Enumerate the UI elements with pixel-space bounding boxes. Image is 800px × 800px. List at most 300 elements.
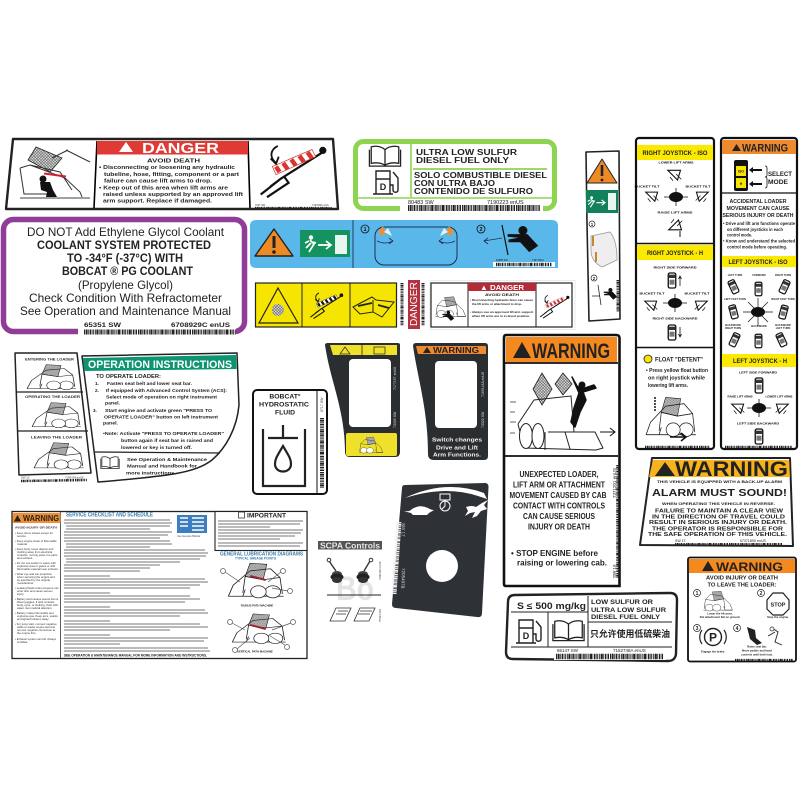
text block: the lift arms or attachment to drop. [472,302,522,306]
text block: steps: If equipped with Advanced Control System (ACS): [106,388,228,393]
icon: joysticks [327,558,373,583]
panel: alarm must sound decal [640,458,793,546]
barcode: 81455 SW [496,259,508,262]
text: switch note: Switch changes [432,438,482,444]
text block: warning message: LIFT ARM OR ATTACHMENT [513,480,605,490]
text: manual note: SEE OPERATION & MAINTENANCE MANUAL FOR MORE INFORMATION AND INSTRUCTIONS. [64,654,207,658]
text: hydrostatic fluid: BOBCAT° [269,392,301,400]
step 2: stop the engine: STOP [771,602,786,608]
section: right joystick iso: LOWER LIFT ARMS [658,160,694,164]
step 4: raise seat bar: controls until both lock. [741,652,773,656]
text block: warning bullets: • Wear eye and ear protection [15,572,52,576]
text block: alarm message: FAILURE TO MAINTAIN A CLEAR VIEW [655,508,783,514]
step 4: raise seat bar [734,624,782,656]
text block: steps: 1. [95,381,99,386]
text block: warning message: • STOP ENGINE before [511,548,598,558]
text block: danger instructions [99,158,243,204]
text: hydrostatic fluid [259,392,309,416]
text block: AVOID DEATH [485,292,519,297]
icon: person under raised lift arms [20,147,90,198]
window opening [349,359,391,427]
text block: warning bullets: material. [17,542,28,546]
chart: radius path machine diagram [220,563,292,608]
section: right joystick h: RIGHT SIDE BACKWARD [652,316,699,320]
text block: alarm message: WHEN OPERATING THIS VEHICLE IN REVERSE. [662,501,775,506]
text block: low sulfur message [591,600,667,621]
text block: warning message: raising or lowering cab. [517,558,607,568]
step 3: engage brake: 3 [696,626,699,632]
text block: warning message: INJURY OR DEATH [528,522,590,532]
text block: when lift arms are in a raised position. [471,314,530,318]
text block: alarm message: RESULT IN SERIOUS INJURY OR DEATH. [649,520,788,526]
section: right joystick h [637,245,713,340]
text block: steps: 2. [95,388,99,393]
text block: warning bullets: ventilate. [17,640,28,644]
text block: warning bullets: • Battery acid causes severe burns. [15,597,59,601]
rotated part numbers [378,561,382,622]
text block: accidental movement warning: • Know and understand the selected [723,238,795,244]
icon: speed arc [405,487,487,499]
chart: vertical path machine diagram [228,614,296,654]
text block: danger instructions: tubeline, hose, fitting, component or a part [104,172,239,178]
heading: lubrication diagrams [220,552,303,560]
text block: danger instructions: raised unless supported by an approved lift [103,192,243,198]
rotated part numbers: 75323 SW [378,609,382,622]
section: right joystick h: BUCKET TILT [684,292,710,296]
barcode [725,446,792,448]
section: left joystick iso: RIGHT TURN [725,326,741,330]
text block: warning bullets: • Battery makes flammable and [15,611,54,615]
step 1: lower lift arms: Put attachment flat on ground. [700,615,740,619]
step 2: stop the engine: Stop the engine. [767,615,789,619]
section: left joystick h: LOWER LIFT ARMS [766,394,792,398]
section: right joystick h: RIGHT JOYSTICK - H [647,251,703,257]
icon: step 1 window latches: 1 [363,227,367,233]
icon: step 1: 1 [591,222,594,227]
text block: steps: Fasten seat belt and lower seat bar. [107,381,192,386]
icon: exit sign [300,230,350,257]
text block: warning bullets: • Do not use loader in space with [15,561,56,565]
icon: fuel pump [373,171,398,194]
section: left joystick iso: LEFT TURN [776,326,790,330]
step 2: stop the engine [758,590,789,619]
barcode: 7190223 enUS [487,200,524,206]
icon: piston and oil drop [263,425,305,486]
step 2: stop the engine: 2 [760,591,763,597]
heading: danger [97,140,248,157]
section: left joystick iso: LEFT JOYSTICK - ISO [728,260,788,266]
text block: steps: TO OPERATE LOADER: [96,374,161,380]
text block: low sulfur message: ULTRA LOW SULFUR [591,608,667,614]
barcode: rotated: SW 19 [612,564,617,578]
panel: lever plate left [325,343,400,457]
section: left joystick h [722,354,796,444]
panel: scpa controls decal [318,541,382,622]
section: left joystick h: LEFT SIDE BACKWARD [737,422,780,426]
section: float detent: • Press yellow float button [646,368,709,374]
rotated part numbers: 73320 SW [481,411,485,428]
text block: warning bullets: • Keep engine clean of flammable [15,539,57,543]
text block: warning bullets: and lighted tobacco away. [17,617,49,621]
heading: warning: WARNING [716,560,783,574]
icon: select mode switch: H [740,182,743,186]
text block: accidental movement warning: control mode before operating. [727,244,787,250]
barcode [78,322,236,335]
text block: warning bullets: • Keep body, loose objects and [15,547,54,551]
heading: warning [722,140,796,154]
icon: select mode switch [734,160,792,191]
watermark: Bo [336,570,374,608]
section: float detent: on right joystick while [648,376,705,382]
heading: operation instructions: OPERATION INSTRUCTIONS [88,359,232,371]
panel: danger avoid death decal [6,139,338,209]
panel: right joystick decal column [634,138,714,449]
step 1: lower lift arms: Lower the lift arms. [707,612,733,616]
text block: steps: Start engine and activate green "PRESS TO [105,408,212,413]
text block: coolant message: BOBCAT ® PG COOLANT [62,264,194,278]
panel: ultra low sulfur fuel decal [356,142,554,212]
panel: yellow pictogram strip [256,283,396,327]
icon: step 2 person pushing [477,225,538,255]
text block: warning bullets: explosive gas. Keep arcs, sparks [17,614,58,618]
text: hydrostatic fluid: FLUID [275,410,295,416]
section: right joystick h: BUCKET TILT [640,292,665,296]
heading: warning [12,513,60,523]
text block: warning bullets: cable to loader engine last and [17,625,56,629]
panel: compact danger decal [402,280,575,330]
text: switch note: Drive and Lift [436,446,478,452]
icon: cylinder [540,295,569,318]
text block: danger instructions: failure can cause lift arms to drop. [104,178,213,184]
icon: select mode switch: ISO [738,170,744,174]
panel: low sulfur diesel decal [506,593,677,661]
icon: warning triangle [259,288,298,323]
text block: fuel message: ULTRA LOW SULFUR [416,148,517,157]
panel: hydrostatic fluid decal [253,390,327,494]
text block: • Disconnecting hydraulic lines can cause [470,298,533,302]
text block: service lines [64,520,210,651]
step 3: engage brake: P [709,630,717,644]
text block: fuel message: CONTENIDO DE SULFURO [414,187,533,196]
text block: warning message: CONTACT WITH CONTROLS [513,502,606,510]
barcode: 7169139 enUS [65,476,84,480]
panel: leave the loader warning decal [688,558,796,662]
text block: warning bullets: • Exhaust system can kill. Always [15,637,57,641]
text block: warning bullets: remove negative connection at [17,628,55,632]
text block: warning message: MOVEMENT CAUSED BY CAB [510,491,607,500]
step 4: raise seat bar: 4 [736,626,739,632]
icon: step 1 [589,221,617,267]
icon: select mode switch: SELECT [768,171,792,178]
barcode: rotated [612,465,618,578]
text block: warning bullets: manufacturer. [17,581,34,585]
barcode: rotated: 7371201 enUS [612,468,617,498]
text block: danger instructions: • Disconnecting or loosening any hydraulic [99,165,235,171]
rotated part numbers [393,366,397,428]
text block: steps: button again if seat bar is raised and [121,438,213,443]
heading: danger: ▲ DANGER [480,283,525,292]
icon: book [369,146,401,166]
text block: steps: lowered or key is turned off. [121,445,192,450]
text block: warning bullets: the engine first. [17,631,36,635]
text block: fuel message: CON ULTRA BAJO [414,179,495,188]
panel: service checklist sheet [12,512,307,658]
section: left joystick h: RAISE LIFT ARMS [728,394,752,398]
panel: throttle plate [392,483,488,617]
text block: fuel message: DIESEL FUEL ONLY [416,156,510,165]
step 3: engage brake: Engage the brake. [701,650,725,654]
panel: operation instructions pictures: ENTERING THE LOADER [25,356,74,362]
text block: alarm message: ALARM MUST SOUND! [652,488,787,499]
text block: accidental movement warning: MOVEMENT CAN CAUSE [726,206,790,212]
icon: parts logo [177,515,207,538]
text block: coolant message [20,225,231,318]
text block: low sulfur message: LOW SULFUR OR [591,600,654,606]
barcode [616,280,620,312]
text: switch note [432,438,482,458]
step 1: lower lift arms: 1 [696,591,699,597]
text block [470,292,533,318]
heading: danger: DANGER [142,140,219,157]
text block: warning bullets: enter skin and cause serious [17,589,53,593]
text block: warning bullets: injury. [17,592,24,596]
heading: warning: WARNING [675,458,788,481]
section: float detent [644,355,709,441]
heading: warning: WARNING [433,346,479,355]
icon: fuel pump [516,620,541,643]
text: sulfur limit: S ≤ 500 mg/kg [517,601,586,611]
window opening [435,361,477,428]
callout: important: IMPORTANT [247,512,286,520]
text block: alarm message: THE OPERATOR IS RESPONSIBLE FOR [652,526,784,532]
section: right joystick iso: BUCKET TILT [634,184,660,188]
chart: vertical path machine diagram: VERTICAL PATH MACHINE [237,650,273,654]
text block: warning bullets: • Keep doors closed except for [15,531,53,535]
icon: warning triangle [587,159,617,183]
barcode: 6737189D enUS [740,539,767,543]
heading: service checklist: SERVICE CHECKLIST AND SCHEDULE [66,512,153,518]
icon: manual with wrench [353,297,394,317]
text block: see manual [126,457,207,476]
section: left joystick iso: RIGHT FAST TURN [771,297,795,301]
text block: coolant message: (Propylene Glycol) [78,278,173,292]
panel: lever plate right with warning [413,343,488,460]
text block: steps: panel. [105,400,120,406]
text block: warning bullets: and exhaust. [17,556,33,560]
barcode: 86147 SW [557,648,579,653]
text block: warning bullets: AVOID INJURY OR DEATH [15,526,57,530]
section: left joystick iso: FORWARD [752,273,766,277]
text block: accidental movement warning: • Drive and lift arm functions operate [723,221,796,226]
rotated part numbers: 73409 SW [393,411,397,428]
section: left joystick iso: LEFT TURN [728,273,742,277]
text block: warning bullets: explosive dust or gases or with [17,564,56,568]
text block: low sulfur message: DIESEL FUEL ONLY [591,615,660,621]
barcode: 7167898 enUS [312,204,329,207]
panel: narrow exit decal [586,151,620,321]
text block: alarm message: IN THE DIRECTION OF TRAVEL COULD [652,514,786,520]
text block: accidental movement warning: on different joysticks in each [727,227,783,232]
heading: pictograms [330,345,397,355]
icon: pedals [330,608,375,621]
icon: striped lift cylinder [261,146,326,197]
icon: step 2 person pushing: 2 [479,227,483,233]
section: left joystick iso: BACKWARD [725,323,741,327]
icon: rabbit [465,500,488,518]
icon: turtle [403,506,434,515]
barcode: 7167780 A [532,259,544,262]
barcode: 80483 SW [408,200,434,206]
panel: blue exit strip decal [250,220,558,268]
text block: warning bullets: as specified by the original [17,578,50,582]
heading: lubrication diagrams: GENERAL LUBRICATION DIAGRAMS [220,552,303,558]
text block: warning bullets: contacts, moving parts, hot parts [17,553,58,557]
heading: scpa controls: SCPA Controls [320,542,381,550]
text block: danger instructions: • Keep out of this area when lift arms are [99,186,228,192]
text: instructions heading [706,576,778,588]
heading: lubrication diagrams: TYPICAL GREASE POINTS [235,556,277,560]
text block: warning message [510,470,607,568]
text block: danger instructions: AVOID DEATH [147,158,200,164]
section: left joystick iso: LEFT FAST TURN [724,297,746,301]
panel: operation instructions pictures: LEAVING THE LOADER [31,434,82,440]
section: left joystick iso [722,256,796,348]
section: left joystick iso: RIGHT TURN [775,273,791,277]
barcode and part numbers [394,522,406,594]
text block: steps: •Note: Activate "PRESS TO OPERATE LOADER" [103,431,224,436]
icon: exit sign [586,190,618,213]
icon: manual book [101,457,119,468]
icon: step 2: 2 [593,276,596,281]
chart: radius path machine diagram: RADIUS PATH MACHINE [241,604,273,608]
icon: orange warning triangle [255,229,293,256]
barcode [645,446,710,448]
barcode: 6708929C enUS [171,322,231,329]
barcode: 65351 SW [84,322,122,329]
text block: warning message: UNEXPECTED LOADER, [520,470,598,479]
icon: step 2 [591,275,617,305]
section: left joystick iso: BACKWARD [751,324,767,328]
text block: steps: Select mode of operation on right instrument [106,394,218,400]
rotated part numbers: 7169114A enUS [481,371,485,397]
barcode [735,659,793,661]
section: right joystick h: RIGHT SIDE FORWARD [654,266,698,270]
text block: see manual: Manual and Handbook for [127,464,197,470]
icon: parts logo: Use Genuine Bobcat [177,535,200,538]
text block: accidental movement warning: control mode. [727,232,752,238]
text block: warning bullets: • Leaking fluids under pressure can [15,586,59,590]
text block: accidental movement warning: ACCIDENTAL LOADER [730,199,787,205]
text block: alarm message: THE SAFE OPERATION OF THIS VEHICLE. [648,532,788,538]
text block: steps: 3. [93,408,97,413]
side tag: rotated danger: DANGER [409,282,420,326]
text block: steps [93,374,228,450]
barcode: SW 17 [675,539,686,543]
rotated part numbers: 7190118 enUS [378,561,382,580]
step 4: raise seat bar: Move pedals and hand [742,648,772,652]
hole [426,550,458,582]
callout: important [215,512,307,550]
text block: warning bullets: service. [17,534,27,538]
barcode [554,648,666,660]
section: right joystick iso: RAISE LIFT ARMS [658,210,692,214]
text block: warning bullets: clothing away from electrical [17,550,53,554]
section: left joystick iso: BACKWARD [775,323,791,327]
text block: see manual: more instructions. [126,470,176,476]
text block: coolant message: TO -34°F (-37°C) WITH [67,251,183,265]
heading: warning: WARNING [532,340,610,363]
section: right joystick iso [634,145,713,237]
barcode: rotated: 6717 SW [320,397,324,412]
text block: danger instructions: arm support. Replace if damaged. [103,198,213,204]
icon: cylinder [310,293,343,319]
heading: warning [506,337,617,363]
text block: warning bullets: when servicing the engine and [17,575,55,579]
panel: select mode and left joystick decal column [721,138,797,449]
rotated part numbers: 7177197 enUS [393,366,397,390]
barcode [675,539,782,544]
barcode [255,204,332,208]
text: switch note: Arm Functions. [433,452,481,458]
text block: warning bullets: body, eyes, or clothing, flush with [17,603,58,607]
panel: operation instructions [82,353,239,482]
text block: warning bullets: flammable material near exhaust. [17,567,59,571]
text block: steps: OPERATE LOADER" button on left instrument [104,414,219,420]
section: float detent: FLOAT "DETENT" [655,356,703,364]
panel: large warning decal [504,335,620,586]
text: chinese notice: 只允许使用低硫柴油 [590,628,670,639]
barcode: 7152748A enUS [613,648,646,653]
panel: operation instructions pictures: OPERATING THE LOADER [25,394,80,399]
text block: warning bullets: water. Get medical attention. [17,606,53,610]
icon: engine governor [440,494,450,511]
panel: coolant decal [4,220,244,335]
section: left joystick h: LEFT JOYSTICK - H [733,359,787,365]
section: right joystick iso: RIGHT JOYSTICK - ISO [642,151,708,157]
text block: warning bullets: • For jump start, connect negative [15,622,57,626]
step 4: raise seat bar: Raise seat bar. [747,644,767,648]
icon: manual book [553,621,584,641]
barcode [493,259,555,267]
text block: see manual: See Operation & Maintenance [127,457,207,463]
section: right joystick iso: BUCKET TILT [686,184,711,188]
text block: alarm message: THIS VEHICLE IS EQUIPPED WITH A BACK-UP ALARM [657,480,782,484]
panel: operation instructions pictures [15,353,91,481]
text block: coolant message: COOLANT SYSTEM PROTECTED [37,238,211,252]
text block: alarm message [648,480,788,538]
text block: accidental movement warning: SERIOUS INJURY OR DEATH [722,213,794,219]
icon: loader [435,297,466,321]
text block: warning bullets [15,526,59,644]
text: hydrostatic fluid: HYDROSTATIC [259,402,309,408]
text block: coolant message: See Operation and Maintenance Manual [20,304,231,318]
step 1: lower lift arms [694,590,740,619]
barcode [21,476,87,481]
heading: warning: WARNING [23,514,59,523]
section: float detent: lowering lift arms. [648,383,688,389]
text block: coolant message: DO NOT Add Ethylene Glycol Coolant [27,225,225,239]
text: instructions heading: AVOID INJURY OR DEATH [706,576,778,582]
icon: loaders [27,365,84,469]
text block: coolant message: Check Condition With Refractometer [29,291,222,305]
heading: danger [468,283,536,292]
text block: warning message: CAN CAUSE SERIOUS [523,512,596,521]
barcode: SW 12 [21,476,30,480]
icon: loader thrown operator [510,373,615,450]
text block: fuel message [414,148,547,196]
icon: step 1 window latches [361,225,457,265]
barcode and part numbers: SW 17 [401,523,406,537]
